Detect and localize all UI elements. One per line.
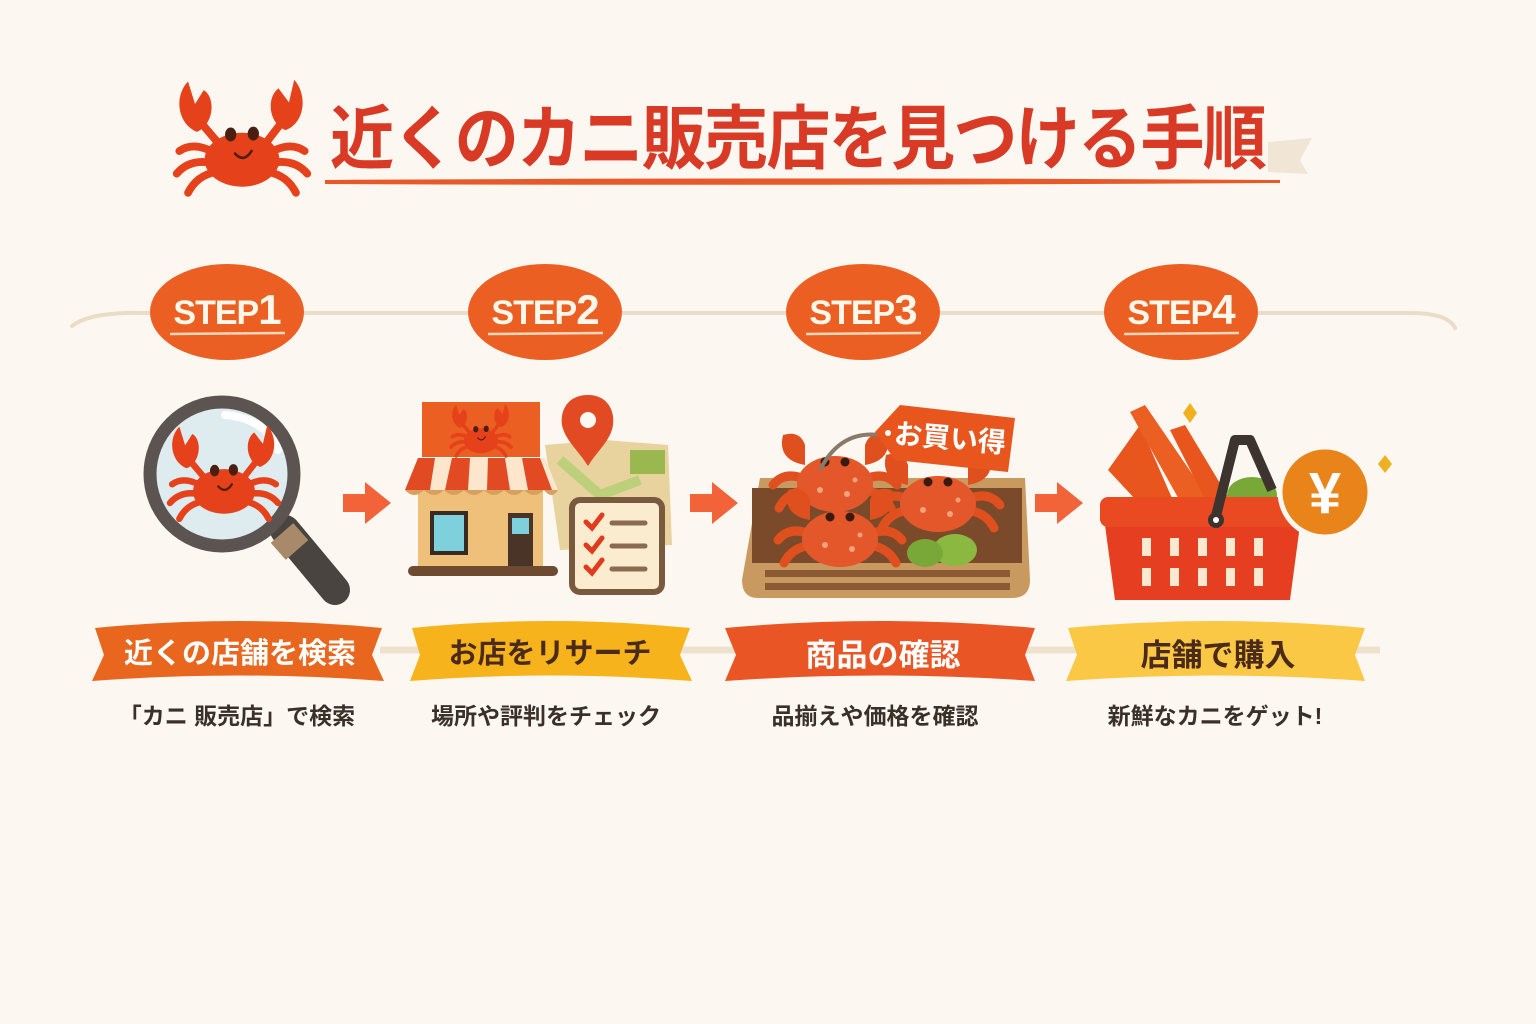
price tag xyxy=(875,405,1015,472)
caption 2: 場所や評判をチェック xyxy=(431,703,661,729)
ribbon 4: 店舗で購入 xyxy=(1140,638,1296,673)
ribbon 4 xyxy=(1066,621,1365,681)
map xyxy=(545,440,672,550)
sign xyxy=(422,402,540,457)
step 4 badge: STEP4 xyxy=(1127,286,1236,333)
awning xyxy=(405,458,558,490)
icon: basket with crab legs and yen coin xyxy=(1100,403,1392,600)
icon: crab tray with tag xyxy=(742,405,1030,598)
pin xyxy=(562,395,613,466)
icon: magnifier with crab xyxy=(150,402,335,590)
icon: basket with crab legs and yen coin: ¥ xyxy=(1309,461,1341,526)
title: 近くのカニ販売店を見つける手順 xyxy=(330,100,1267,178)
ribbon 1: 近くの店舗を検索 xyxy=(124,637,356,670)
arrow 3 xyxy=(1035,482,1083,524)
ribbon 2: お店をリサーチ xyxy=(448,637,652,670)
building xyxy=(418,485,543,570)
caption 3: 品揃えや価格を確認 xyxy=(772,703,978,729)
step 1 badge xyxy=(150,264,304,360)
timeline line xyxy=(72,313,1455,328)
step 2 badge: STEP2 xyxy=(491,286,599,333)
icon: shop with map and checklist xyxy=(405,395,672,592)
price tag: お買い得 xyxy=(893,418,1007,459)
ribbon connector line xyxy=(380,646,1380,654)
arrow 1 xyxy=(343,482,391,524)
caption 4: 新鮮なカニをゲット! xyxy=(1108,703,1322,729)
ribbon 1 xyxy=(92,621,384,681)
step 3 badge: STEP3 xyxy=(809,286,917,333)
arrow 2 xyxy=(690,482,738,524)
step 2 badge xyxy=(468,264,622,360)
ribbon 2 xyxy=(410,621,692,681)
step 1 badge: STEP1 xyxy=(173,286,281,333)
ribbon 3 xyxy=(725,621,1035,681)
step 4 badge xyxy=(1104,264,1258,360)
ribbon 3: 商品の確認 xyxy=(806,638,960,673)
title crab icon xyxy=(177,80,307,193)
step 3 badge xyxy=(786,264,940,360)
caption 1: 「カニ 販売店」で検索 xyxy=(119,703,355,729)
checklist xyxy=(572,500,662,592)
